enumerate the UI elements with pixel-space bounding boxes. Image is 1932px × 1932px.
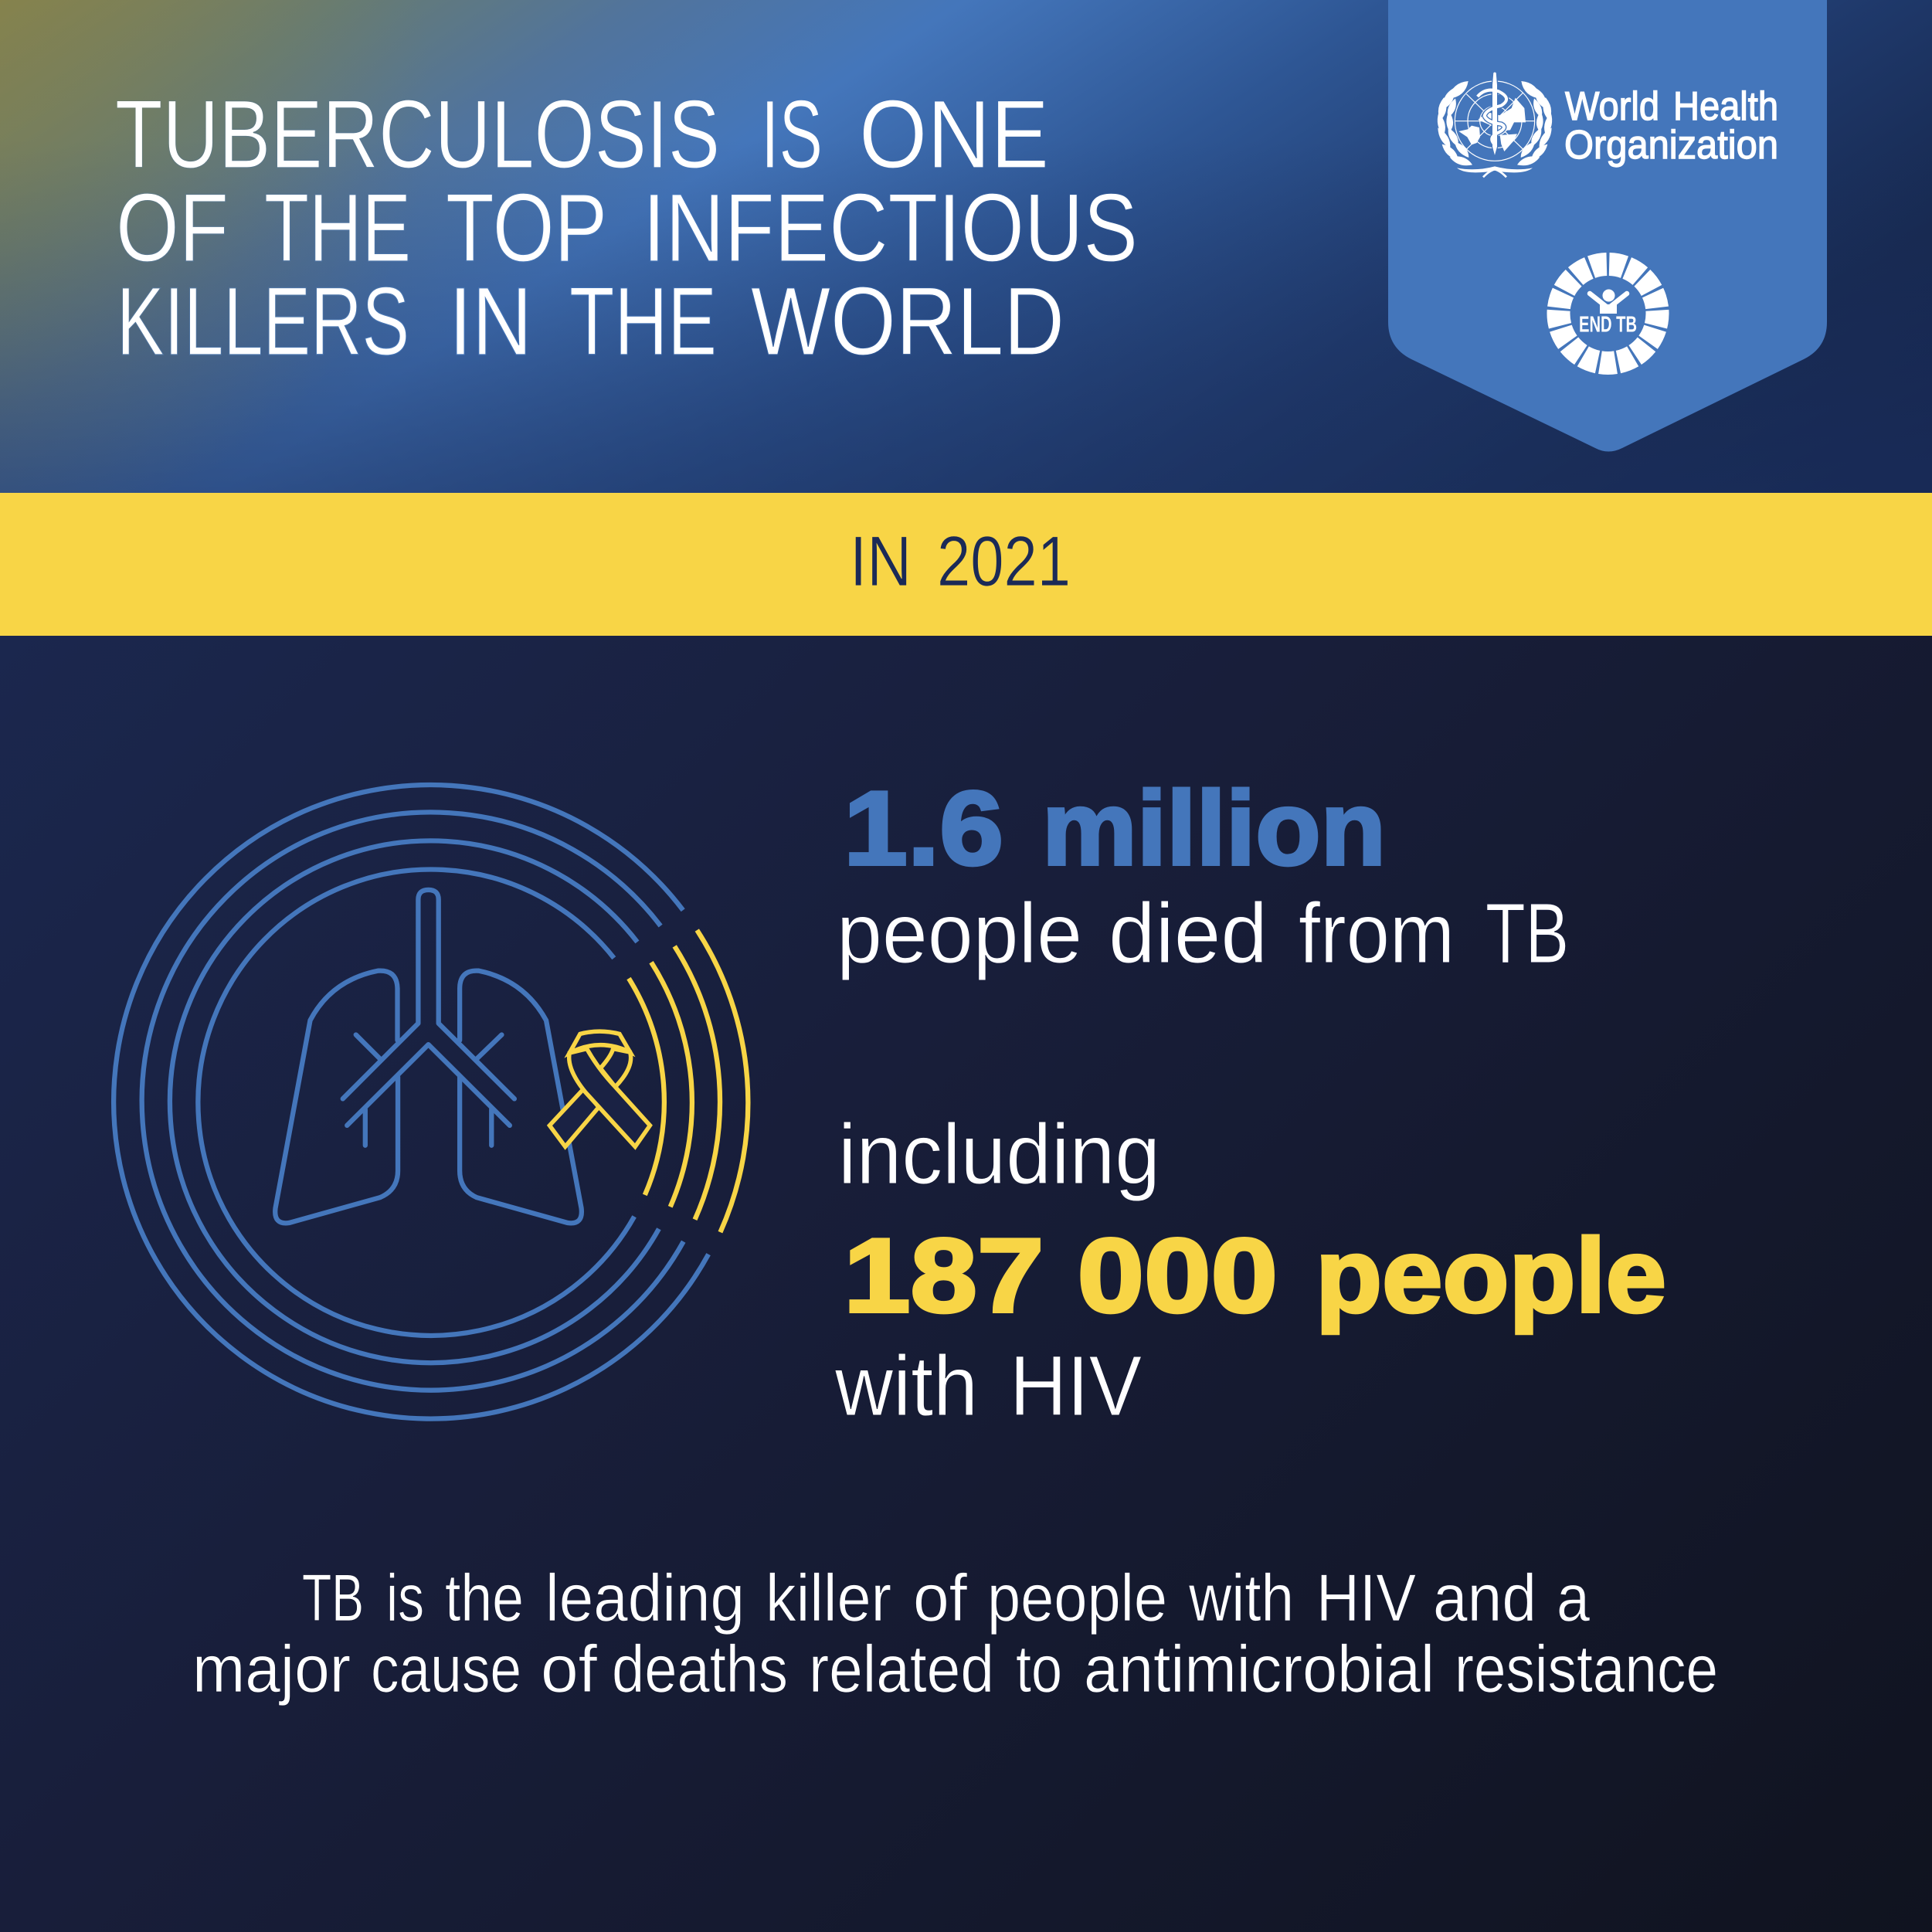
icon: awareness ribbon bbox=[549, 1031, 650, 1146]
title: INFECTIOUS bbox=[643, 175, 1138, 282]
title: IS bbox=[761, 81, 823, 188]
title: WORLD bbox=[751, 268, 1064, 375]
title: TOP bbox=[446, 175, 607, 282]
lower panel background bbox=[0, 636, 1932, 1932]
closing statement: is bbox=[386, 1561, 424, 1635]
icon: laurel left bbox=[1438, 81, 1472, 165]
icon: WHO emblem bbox=[1438, 72, 1552, 177]
closing statement: resistance bbox=[1455, 1632, 1718, 1706]
statistic: deaths bbox=[837, 769, 1569, 981]
WHO wordmark bbox=[1564, 84, 1778, 168]
title: TUBERCULOSIS bbox=[115, 81, 720, 188]
statistic: HIV: including bbox=[838, 1107, 1160, 1202]
closing statement: the bbox=[445, 1561, 524, 1635]
closing statement: a bbox=[1557, 1561, 1590, 1635]
icon: lungs, ribbon and rings bbox=[114, 785, 748, 1419]
title: IN bbox=[449, 268, 532, 375]
WHO wordmark: Health bbox=[1673, 84, 1778, 129]
statistic: deaths: 1.6 bbox=[844, 769, 1003, 887]
closing statement: people bbox=[987, 1561, 1167, 1635]
closing statement: HIV bbox=[1316, 1561, 1416, 1635]
closing statement: major bbox=[192, 1632, 351, 1706]
closing statement: of bbox=[913, 1561, 968, 1635]
closing statement bbox=[192, 1561, 1718, 1706]
statistic: HIV: HIV bbox=[1010, 1339, 1142, 1434]
rings: yellow arcs bbox=[629, 930, 748, 1232]
title: ONE bbox=[859, 81, 1049, 188]
pennant with logos bbox=[1388, 0, 1827, 451]
year band bbox=[0, 493, 1932, 636]
statistic: deaths: million bbox=[1042, 769, 1386, 887]
year label bbox=[850, 522, 1071, 601]
WHO wordmark: Organization bbox=[1564, 123, 1778, 168]
header background bbox=[0, 0, 1932, 493]
closing statement: and bbox=[1433, 1561, 1536, 1635]
closing statement: cause bbox=[371, 1632, 521, 1706]
statistic: deaths: from bbox=[1299, 886, 1455, 981]
statistic: deaths: TB bbox=[1486, 886, 1569, 981]
closing statement: deaths bbox=[612, 1632, 788, 1706]
statistic: deaths: died bbox=[1109, 886, 1268, 981]
title bbox=[115, 81, 1138, 375]
icon: lungs bbox=[275, 890, 582, 1223]
closing statement: leading bbox=[545, 1561, 745, 1635]
WHO wordmark: World bbox=[1565, 84, 1659, 129]
statistic: HIV: people bbox=[1316, 1217, 1666, 1334]
icon: End TB logo: END TB bbox=[1579, 312, 1637, 337]
closing statement: TB bbox=[302, 1561, 364, 1635]
title: THE bbox=[264, 175, 411, 282]
title: KILLERS bbox=[117, 268, 409, 375]
title: THE bbox=[569, 268, 717, 375]
title: OF bbox=[116, 175, 229, 282]
closing statement: of bbox=[541, 1632, 598, 1706]
icon: laurel right bbox=[1517, 81, 1552, 165]
closing statement: with bbox=[1188, 1561, 1294, 1635]
statistic: HIV bbox=[834, 1107, 1666, 1434]
closing statement: to bbox=[1016, 1632, 1062, 1706]
closing statement: related bbox=[809, 1632, 994, 1706]
closing statement: antimicrobial bbox=[1084, 1632, 1435, 1706]
statistic: HIV: 187 000 bbox=[844, 1217, 1278, 1334]
statistic: HIV: with bbox=[834, 1339, 978, 1434]
year label: 2021 bbox=[937, 522, 1071, 601]
closing statement: killer bbox=[766, 1561, 891, 1635]
rings: blue arcs bbox=[114, 785, 708, 1419]
icon: End TB logo bbox=[1559, 264, 1658, 363]
statistic: deaths: people bbox=[837, 886, 1082, 981]
year label: IN bbox=[850, 522, 912, 601]
